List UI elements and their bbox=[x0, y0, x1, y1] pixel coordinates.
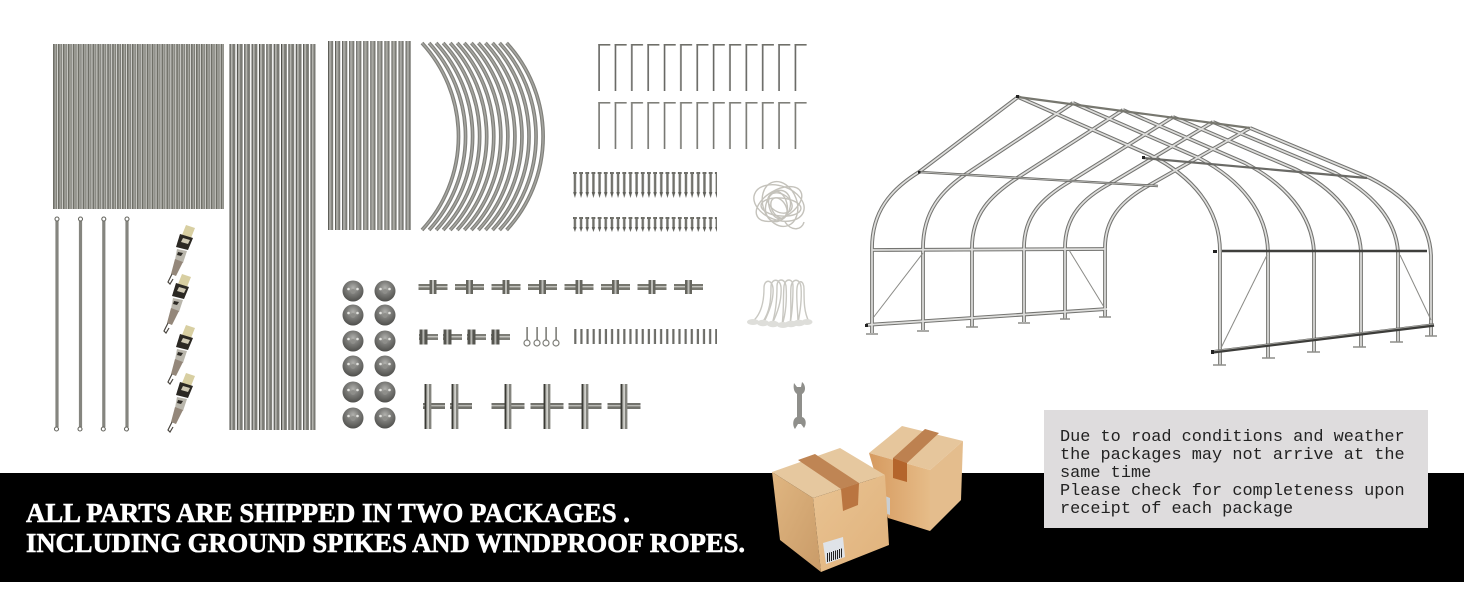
callout: delivery note: same time bbox=[1060, 464, 1151, 483]
screws bbox=[573, 172, 717, 232]
short connectors bbox=[419, 330, 510, 344]
heading: ALL PARTS ARE SHIPPED IN TWO PACKAGES . bbox=[26, 498, 630, 528]
large tee and cross fittings bbox=[423, 384, 640, 429]
callout: delivery note: Please check for completeness upon bbox=[1060, 482, 1405, 501]
icon: front cardboard box bbox=[772, 448, 889, 572]
cross connectors row bbox=[418, 280, 703, 294]
rods: short straight tubes bbox=[53, 44, 224, 209]
tent frame illustration bbox=[865, 95, 1437, 365]
eye hooks bbox=[524, 327, 559, 346]
rods: medium straight tubes bbox=[328, 41, 412, 230]
small end caps bbox=[865, 95, 1217, 354]
heading: INCLUDING GROUND SPIKES AND WINDPROOF ROPES. bbox=[26, 528, 745, 558]
barcode bbox=[828, 548, 842, 562]
rods: long straight tubes bbox=[230, 44, 316, 430]
icon: coiled windproof rope bbox=[749, 177, 809, 231]
curved roof tubes bbox=[422, 43, 543, 230]
bolts row bbox=[574, 329, 717, 344]
base discs bbox=[342, 280, 396, 428]
ratchet tensioners bbox=[164, 225, 195, 432]
purlins and rails bbox=[919, 97, 1434, 352]
callout: delivery note: receipt of each package bbox=[1060, 500, 1293, 519]
L-shaped ground hooks bbox=[598, 44, 810, 149]
side brace wires bbox=[873, 250, 1431, 348]
callout: delivery note bbox=[1044, 410, 1428, 528]
icon: bungee balls bbox=[747, 280, 812, 328]
thin tie rods with eyelets bbox=[54, 217, 129, 431]
icon: back cardboard box bbox=[869, 426, 963, 531]
black footer band bbox=[0, 473, 1464, 582]
icon: wrench bbox=[793, 382, 806, 429]
foot plates bbox=[866, 317, 1437, 365]
callout: delivery note: the packages may not arrive at the bbox=[1060, 446, 1405, 465]
heading bbox=[26, 498, 745, 558]
callout: delivery note: Due to road conditions and weather bbox=[1060, 428, 1405, 447]
